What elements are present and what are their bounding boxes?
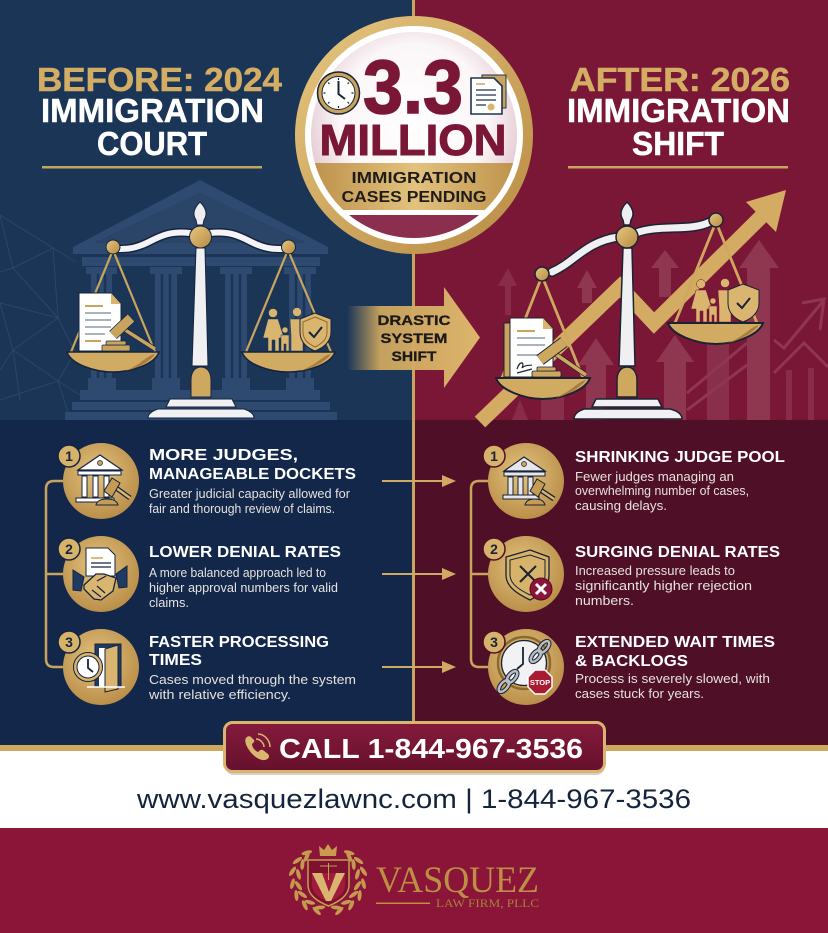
heading: after 2026: IMMIGRATION [567,92,790,129]
finial [621,202,633,225]
body: cases stuck for years. [575,686,704,701]
statistic caption: CASES PENDING [342,189,486,206]
phone number: CALL 1-844-967-3536 [279,733,583,764]
icon: courthouse and gavel [488,443,564,519]
heading: before 2024: BEFORE: 2024 [37,61,283,98]
connector: left bracket [46,481,63,667]
heading rule left [42,166,262,168]
heading: before 2024: COURT [97,125,207,162]
body: A more balanced approach led to [149,565,326,580]
body [148,672,356,702]
scales: tipped after [496,202,763,419]
right chains [675,222,757,323]
column [619,248,635,366]
heading [149,634,329,669]
arrow: drastic system shift: DRASTIC [378,312,450,328]
arrow: drastic system shift [347,287,480,388]
shield [308,860,349,906]
heading: before 2024 [37,61,283,162]
icon: chained clock and stop sign: STOP [530,678,550,687]
heading: LOWER DENIAL RATES [149,544,341,561]
badge 2: 2 [490,541,498,557]
pivot left [106,240,120,254]
item right 3: extended wait times [483,629,775,705]
body [149,565,338,610]
tilted beam [552,222,710,272]
panel: after list background [414,420,828,746]
pivot right [282,240,296,254]
finial [194,202,206,225]
laurel wreath left [288,849,325,916]
wordmark rule [376,902,430,904]
heading: MANAGEABLE DOCKETS [149,466,356,483]
footer logo band [0,828,828,933]
icon: document and gavel on left pan [79,293,155,351]
panel: after background [414,0,828,420]
heading: before 2024: IMMIGRATION [41,92,264,129]
pivot right [709,213,723,227]
body: significantly higher rejection [575,578,752,593]
arrow: drastic system shift: SYSTEM [380,330,448,346]
body [575,563,752,608]
logo: vasquez law firm [288,844,539,916]
hub [616,226,638,248]
heading: after 2026: SHIFT [632,125,724,162]
badge 2: 2 [65,541,73,557]
hub [190,226,212,248]
body: with relative efficiency. [148,687,291,702]
body: Cases moved through the system [149,672,356,687]
footer contact band [0,746,828,828]
tagline: LAW FIRM, PLLC [436,896,539,910]
heading [575,634,775,670]
base [574,367,682,419]
body [149,486,351,516]
right pan chains [246,250,331,352]
badge 3 [58,631,80,653]
icon: family with shield [691,278,759,322]
decorative network lines [0,215,80,412]
heading: SHRINKING JUDGE POOL [575,449,785,466]
badge 1 [483,445,505,467]
icon: signed document with gavel [504,318,586,377]
statistic caption: IMMIGRATION [352,170,476,187]
badge 3: 3 [490,634,498,650]
icon: family with shield on right pan [263,308,331,351]
heading: TIMES [149,652,202,669]
left chains [502,276,583,378]
badge 1: 1 [65,448,73,464]
statistic million: MILLION [320,116,506,165]
gold trend arrow [480,190,786,422]
heading: EXTENDED WAIT TIMES [575,634,775,651]
body: claims. [149,595,189,610]
heading: after 2026 [567,61,790,162]
icon: courthouse and gavel [63,443,139,519]
icon: phone [245,734,270,760]
crown [319,844,337,856]
body: Process is severely slowed, with [575,671,770,686]
statistic 3.3: 3.3 [363,45,463,130]
scales: balanced before [67,202,335,418]
laurel wreath right [331,849,368,916]
base [148,367,254,418]
right pan [668,323,763,344]
arrow: row 2 [382,568,456,580]
body: overwhelming number of cases, [575,483,749,498]
body: Fewer judges managing an [575,469,734,484]
icon: documents [471,75,506,114]
item left 3: faster processing [58,629,356,705]
icon: shield with rejection [488,536,564,612]
body: Increased pressure leads to [575,563,735,578]
call button [224,722,605,775]
body: causing delays. [575,498,667,513]
central statistic badge [295,16,533,254]
left pan [67,352,159,372]
badge 2 [58,538,80,560]
body [575,671,770,701]
badge 2 [483,538,505,560]
heading: FASTER PROCESSING [149,634,329,651]
item left 2: lower denial rates [58,536,341,612]
rising arrows backdrop [498,240,828,420]
left pan chains [71,250,155,352]
beam [118,232,282,249]
left pan [496,378,590,399]
arrow: row 3 [382,661,456,673]
item right 2: surging denial rates [483,536,780,612]
heading rule right [568,166,788,168]
badge 3 [483,631,505,653]
central column [192,248,208,366]
badge 1: 1 [490,448,498,464]
body: fair and thorough review of claims. [149,501,335,516]
item right 1: shrinking judge pool [483,443,785,519]
wordmark: VASQUEZ [376,860,539,901]
heading: MORE JUDGES, [149,447,298,464]
heading [149,447,356,483]
arrow: drastic system shift: SHIFT [392,348,437,364]
badge 3: 3 [65,634,73,650]
badge 1 [58,445,80,467]
icon: handshake and document [63,536,139,612]
body: numbers. [575,593,634,608]
icon: chained clock and stop sign [488,629,564,705]
heading: after 2026: AFTER: 2026 [570,61,790,98]
centre gold divider [412,0,415,746]
heading: SURGING DENIAL RATES [575,544,780,561]
item left 1: more judges [58,443,356,519]
panel: before list background [0,420,414,746]
icon: clock [318,72,360,114]
body [575,469,749,513]
footer gold rule [0,745,828,751]
website and phone line: www.vasquezlawnc.com | 1-844-967-3536 [136,784,691,814]
panel: before background [0,0,414,420]
arrow: row 1 [382,475,456,487]
right pan [242,352,335,372]
icon: clock and door [63,629,139,705]
courthouse backdrop [65,180,337,420]
body: Greater judicial capacity allowed for [149,486,351,501]
body: higher approval numbers for valid [149,580,338,595]
statistic caption [342,170,486,206]
connector: right bracket [471,481,488,667]
heading: & BACKLOGS [575,653,688,670]
pivot left [535,267,549,281]
